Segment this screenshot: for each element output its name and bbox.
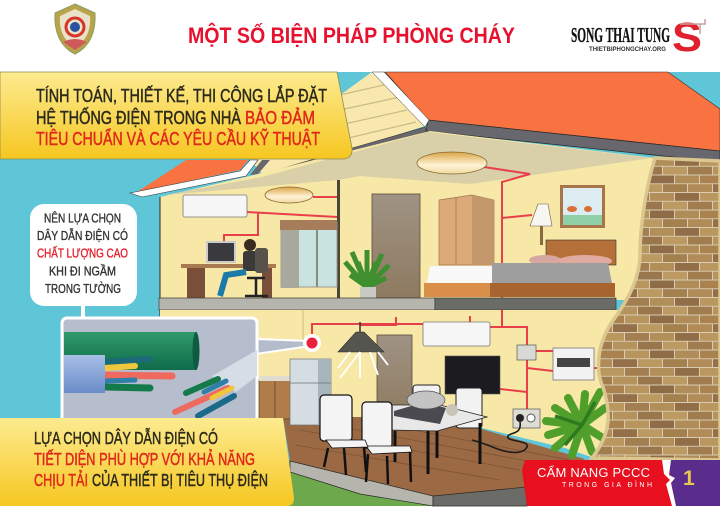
switch box — [517, 345, 536, 360]
blue cable — [64, 355, 105, 393]
green conduit — [64, 332, 200, 370]
dining table with pot — [320, 385, 487, 484]
table legs — [395, 423, 480, 474]
upper door — [372, 194, 420, 298]
lower door — [377, 335, 412, 420]
roof: fascia grey — [426, 120, 720, 162]
back chairs — [413, 385, 440, 407]
floor slab — [159, 298, 616, 310]
bed — [424, 240, 616, 297]
wall outlet with plug — [472, 409, 540, 452]
pointer to wall location — [256, 339, 310, 354]
roof: left gable fascia — [266, 127, 426, 178]
wall picture — [560, 185, 605, 228]
desk — [181, 264, 276, 298]
panel: cable close-up — [62, 304, 321, 428]
grass — [285, 460, 535, 506]
upper wall — [160, 131, 655, 300]
badge: cẩm nang PCCC: CẨM NANG PCCC — [537, 465, 650, 480]
upper ceiling — [165, 132, 652, 195]
room corner line — [302, 310, 304, 340]
banner: top heading: HỆ THỐNG ĐIỆN TRONG NHÀ — [36, 107, 242, 128]
connector from callout to panel — [81, 304, 85, 320]
gable siding — [250, 72, 425, 177]
refrigerator — [290, 359, 331, 425]
badge: cẩm nang PCCC — [522, 460, 720, 506]
gable siding lines — [340, 84, 416, 140]
lower wall — [160, 310, 620, 460]
cut wire bundle — [175, 379, 234, 416]
cooking pot — [407, 391, 445, 409]
banner: top heading: TÍNH TOÁN, THIẾT KẾ, THI CÔNG LẮP ĐẶT — [36, 85, 327, 106]
roof: white gable edge — [372, 72, 429, 127]
wood floor — [283, 417, 585, 496]
bowl — [446, 404, 458, 416]
upper wiring — [224, 167, 532, 298]
television — [445, 356, 500, 394]
callout: chất lượng cao: TRONG TƯỜNG — [45, 281, 121, 296]
banner: top heading: TIÊU CHUẨN VÀ CÁC YÊU CẦU KỸ THUẬT — [36, 128, 320, 149]
banner: bottom note: CỦA THIẾT BỊ TIÊU THỤ ĐIỆN — [92, 469, 268, 490]
lower wiring — [312, 310, 602, 415]
brick wall — [592, 158, 720, 460]
location marker — [303, 334, 321, 352]
logo: Song Thai Tung — [571, 14, 705, 60]
wardrobe — [439, 195, 494, 265]
banner: top heading — [0, 72, 352, 159]
air conditioner lower — [423, 322, 490, 346]
light beam — [212, 350, 257, 392]
logo: shield emblem — [55, 4, 95, 54]
callout: chất lượng cao: DÂY DẪN ĐIỆN CÓ — [37, 228, 128, 243]
pendant lamp — [338, 322, 388, 378]
ceiling lamp left — [265, 187, 313, 203]
title: MỘT SỐ BIỆN PHÁP PHÒNG CHÁY — [188, 22, 515, 48]
badge: cẩm nang PCCC: TRONG GIA ĐÌNH — [562, 480, 652, 489]
roof: left grey rafter — [250, 160, 270, 175]
callout: chất lượng cao: CHẤT LƯỢNG CAO — [37, 246, 128, 260]
induction stove — [394, 402, 446, 424]
banner: top heading: BẢO ĐẢM — [245, 107, 315, 128]
banner: bottom note: LỰA CHỌN DÂY DẪN ĐIỆN CÓ — [34, 427, 218, 448]
roof: left eave white trim — [130, 160, 258, 197]
callout: chất lượng cao: KHI ĐI NGẦM — [49, 264, 116, 278]
table top — [387, 405, 487, 431]
callout: chất lượng cao — [30, 204, 137, 306]
front chair left — [320, 395, 368, 475]
roof: left eave orange — [137, 160, 248, 192]
cabinet — [259, 376, 291, 419]
logo: Song Thai Tung: THIETBIPHONGCHAY.ORG — [589, 46, 666, 53]
logo: Song Thai Tung: S — [672, 14, 702, 60]
front chair center — [362, 402, 412, 484]
ceiling lamp right — [417, 152, 487, 174]
banner: bottom note: CHỊU TẢI — [34, 469, 88, 490]
left wall outline — [159, 197, 161, 420]
potted plant upper — [345, 250, 389, 298]
lower slab — [290, 461, 527, 506]
electrical panel — [553, 348, 594, 380]
wall lamp — [530, 204, 552, 245]
potted plant lower — [546, 392, 606, 455]
banner: bottom note — [0, 418, 294, 506]
wires from blue cable — [104, 359, 172, 388]
badge: cẩm nang PCCC: 1 — [683, 467, 695, 490]
cable panel body — [62, 318, 257, 428]
computer monitor — [207, 242, 235, 262]
person at desk — [220, 239, 268, 296]
roof: main orange — [385, 72, 720, 151]
callout: chất lượng cao: NÊN LỰA CHỌN — [44, 210, 121, 226]
air conditioner upper — [183, 195, 247, 217]
window with curtains — [280, 220, 337, 288]
floor planks — [295, 420, 570, 480]
house illustration — [130, 72, 720, 506]
banner: bottom note: TIẾT DIỆN PHÙ HỢP VỚI KHẢ NĂNG — [34, 448, 255, 469]
upper floor room divider — [337, 180, 340, 298]
